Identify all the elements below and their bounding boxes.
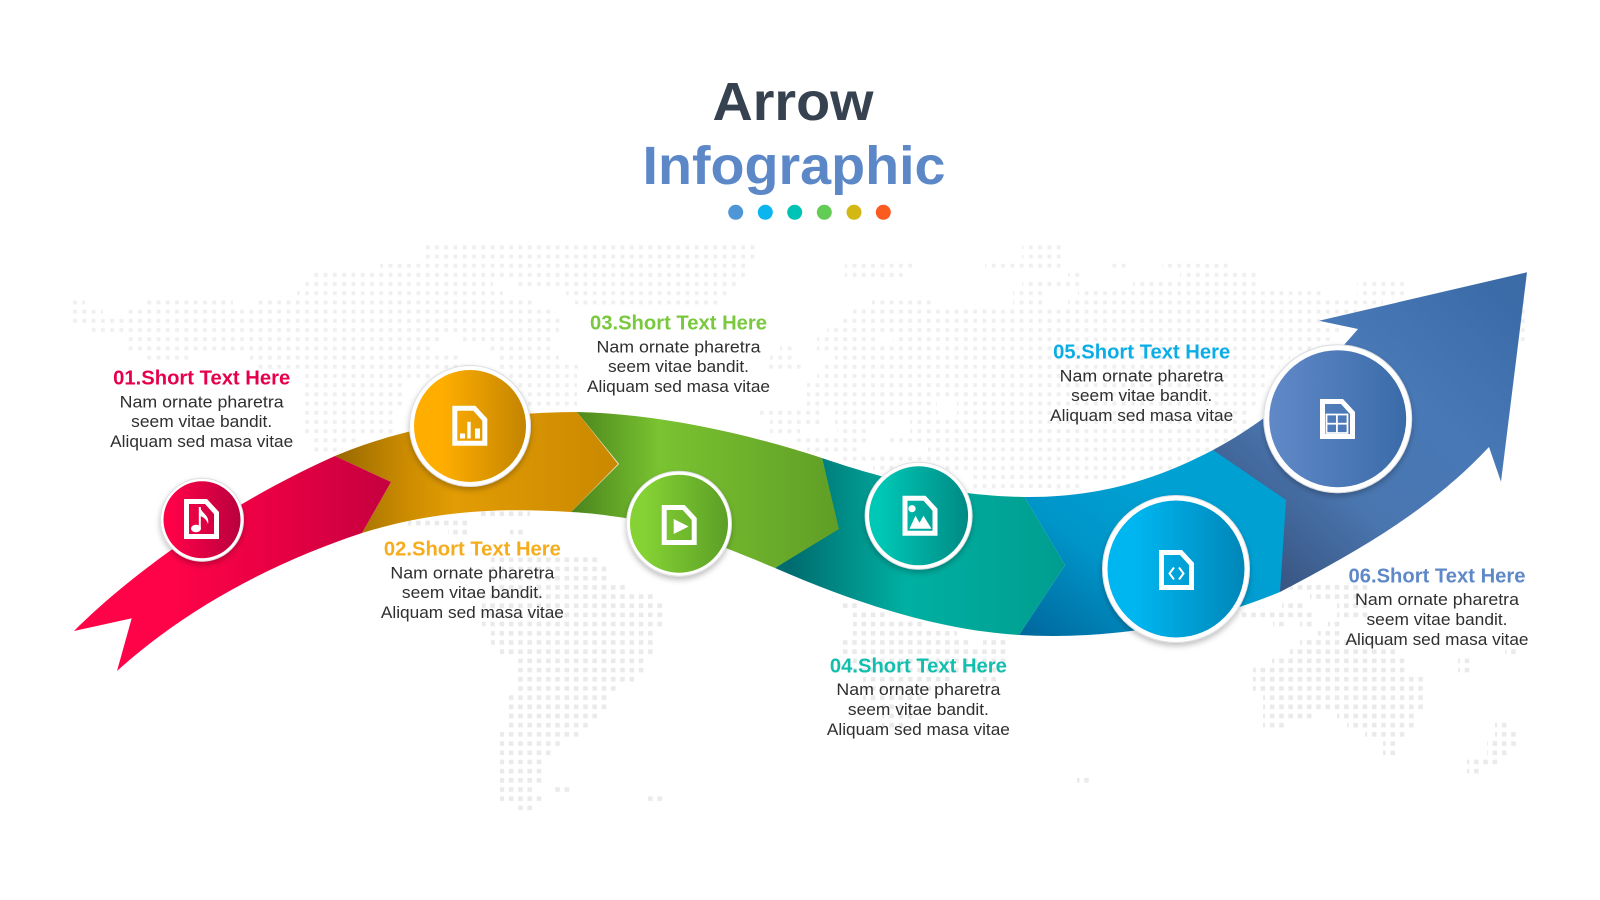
- icon: video file: [662, 505, 697, 545]
- arrow segment 3: green: [571, 412, 839, 568]
- title: Infographic: [642, 136, 946, 196]
- arrow segment 1: red ribbon tail: [74, 456, 391, 671]
- text block 04: seem vitae bandit.: [848, 700, 989, 719]
- step 2 badge: [410, 366, 530, 486]
- text block 01: [110, 368, 293, 451]
- text block 06: seem vitae bandit.: [1366, 610, 1508, 629]
- text block 05: 05.Short Text Here: [1053, 342, 1230, 364]
- text block 06: Nam ornate pharetra: [1355, 590, 1520, 609]
- text block 06: 06.Short Text Here: [1348, 566, 1526, 588]
- dotted world map: northern rows: [70, 243, 1530, 491]
- arrow segment 5: cyan: [1019, 450, 1286, 636]
- text block 02: seem vitae bandit.: [402, 583, 543, 602]
- text block 03: seem vitae bandit.: [608, 357, 749, 376]
- text block 04: Aliquam sed masa vitae: [827, 720, 1010, 739]
- icon: code file: [1159, 550, 1194, 590]
- text block 04: Nam ornate pharetra: [836, 680, 1001, 699]
- title decorative coloured dots: [728, 205, 891, 220]
- text block 01: 01.Short Text Here: [113, 368, 290, 390]
- arrow segment 2: orange: [335, 412, 618, 533]
- arrow segment 6: blue arrowhead: [1213, 272, 1527, 592]
- text block 05: Nam ornate pharetra: [1060, 366, 1224, 386]
- step 5 badge: [1102, 496, 1250, 642]
- text block 01: seem vitae bandit.: [131, 412, 272, 431]
- text block 02: 02.Short Text Here: [384, 538, 561, 560]
- text block 01: Aliquam sed masa vitae: [110, 432, 293, 451]
- text block 04: 04.Short Text Here: [830, 656, 1007, 678]
- title: [642, 72, 946, 196]
- text block 06: [1346, 566, 1528, 649]
- text block 05: seem vitae bandit.: [1071, 386, 1212, 405]
- step 4 badge: [865, 462, 972, 569]
- text block 03: 03.Short Text Here: [590, 312, 767, 334]
- icon: table file: [1320, 399, 1355, 439]
- icon: music file: [184, 499, 219, 539]
- title: Arrow: [712, 72, 875, 132]
- text block 03: Aliquam sed masa vitae: [587, 377, 770, 396]
- icon: image file: [902, 496, 938, 536]
- text block 01: Nam ornate pharetra: [120, 392, 284, 411]
- text block 03: [587, 312, 770, 396]
- text block 03: Nam ornate pharetra: [596, 337, 761, 356]
- arrow segment 4: teal: [775, 458, 1065, 635]
- text block 02: Aliquam sed masa vitae: [381, 603, 564, 622]
- dotted world map: southern rows: [408, 509, 1520, 812]
- text block 05: Aliquam sed masa vitae: [1050, 406, 1233, 425]
- step 3 badge: [626, 471, 732, 576]
- icon: chart file: [452, 406, 487, 446]
- step 1 badge: [160, 478, 244, 561]
- step 6 badge: [1264, 345, 1412, 493]
- text block 06: Aliquam sed masa vitae: [1346, 630, 1528, 649]
- text block 02: [381, 538, 564, 622]
- text block 05: [1050, 342, 1233, 425]
- text block 04: [827, 656, 1010, 739]
- text block 02: Nam ornate pharetra: [390, 563, 555, 582]
